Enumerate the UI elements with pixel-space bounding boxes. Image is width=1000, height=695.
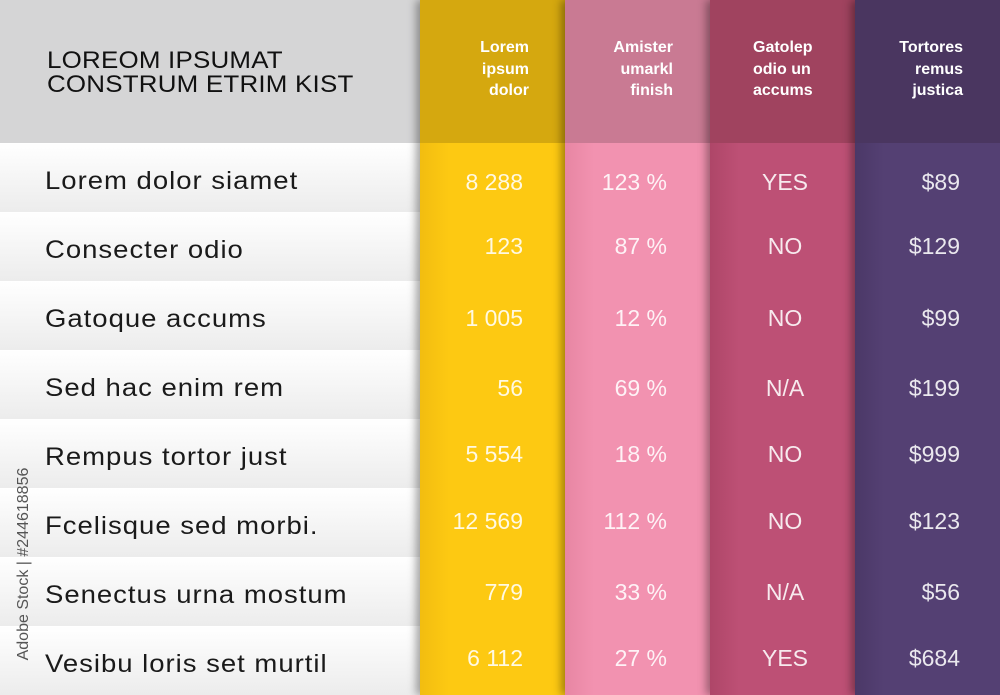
column: yellow: 5 554 [465, 441, 523, 467]
column: yellow: 1 005 [465, 305, 523, 331]
column: raspberry: N/A [766, 579, 804, 605]
column: raspberry: NO [768, 305, 802, 331]
column: raspberry: NO [768, 233, 802, 259]
column: yellow: 6 112 [467, 645, 523, 671]
column: yellow: Lorem [480, 39, 529, 56]
column: pink: 18 % [615, 441, 667, 467]
column: raspberry: N/A [766, 375, 804, 401]
header panel: title [0, 0, 420, 143]
row labels: Sed hac enim rem [45, 374, 284, 402]
watermark text: Adobe Stock | #244618856 [15, 468, 32, 660]
column: raspberry: NO [768, 508, 802, 534]
column: pink: 27 % [615, 645, 667, 671]
row labels: Fcelisque sed morbi. [45, 512, 319, 540]
column: yellow: 779 [485, 579, 523, 605]
row labels: Vesibu loris set murtil [45, 650, 328, 678]
column: raspberry: accums [753, 82, 813, 99]
column: yellow: 56 [497, 375, 523, 401]
column: raspberry: YES [762, 169, 808, 195]
row labels [0, 167, 420, 695]
title [47, 47, 354, 98]
column: raspberry: YES [762, 645, 808, 671]
column: purple: $684 [909, 645, 960, 671]
column: yellow: 8 288 [465, 169, 523, 195]
column: purple [855, 0, 1000, 695]
column: pink: finish [630, 82, 673, 99]
column: raspberry: NO [768, 441, 802, 467]
column: pink: 33 % [615, 579, 667, 605]
column: pink [565, 0, 710, 695]
column: purple: $129 [909, 233, 960, 259]
row labels: Senectus urna mostum [45, 581, 348, 609]
column: purple: $89 [922, 169, 960, 195]
row labels: Gatoque accums [45, 305, 267, 333]
column: purple: $123 [909, 508, 960, 534]
row labels: Rempus tortor just [45, 443, 287, 471]
column: purple: justica [912, 82, 963, 99]
column: yellow: ipsum [482, 60, 529, 78]
column: purple: remus [915, 60, 963, 78]
column: pink: 69 % [615, 375, 667, 401]
row labels: Consecter odio [45, 236, 244, 264]
column: yellow [420, 0, 565, 695]
column: pink: umarkl [621, 60, 673, 78]
column: raspberry: odio un [753, 60, 811, 78]
column: purple: $999 [909, 441, 960, 467]
column: pink: 12 % [615, 305, 667, 331]
column: raspberry: Gatolep [753, 39, 813, 56]
column: yellow: 12 569 [453, 508, 523, 534]
column: raspberry [710, 0, 855, 695]
column: yellow: 123 [485, 233, 523, 259]
column: purple: Tortores [899, 39, 963, 56]
title: CONSTRUM ETRIM KIST [47, 71, 354, 98]
column: pink: 87 % [615, 233, 667, 259]
column: purple: $56 [922, 579, 960, 605]
title: LOREOM IPSUMAT [47, 47, 283, 74]
column: purple: $99 [922, 305, 960, 331]
column: purple: $199 [909, 375, 960, 401]
column: pink: 123 % [602, 169, 667, 195]
column: pink: Amister [613, 39, 673, 56]
column: yellow: dolor [489, 82, 529, 99]
column: pink: 112 % [603, 508, 667, 534]
row labels: Lorem dolor siamet [45, 167, 298, 195]
